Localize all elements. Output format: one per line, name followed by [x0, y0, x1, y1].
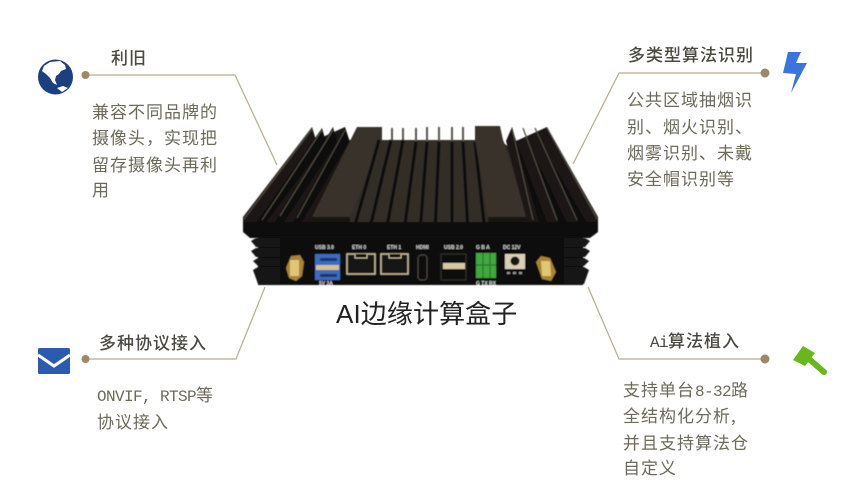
left raised block [312, 127, 382, 217]
text: Ai算法植入 description [623, 376, 749, 479]
heading: 多种协议接入: 多种协议接入 [99, 329, 207, 354]
text: Ai算法植入 description: 自定义 [623, 454, 677, 479]
heading: Ai算法植入: Ai算法植入 [650, 327, 740, 352]
text: 多类型算法识别 description: 安全帽识别等 [627, 165, 735, 190]
left fin group [243, 127, 350, 232]
text: 利旧 description: 摄像头，实现把 [92, 124, 218, 149]
front panel: DC 12V [503, 245, 521, 251]
lower edge band [243, 222, 598, 238]
device: AI edge computing box [242, 125, 599, 287]
heading: 利旧: 利旧 [111, 44, 147, 69]
middle fins [353, 140, 485, 232]
icon: gavel [793, 346, 827, 375]
right raised block [475, 126, 527, 217]
text: Ai算法植入 description: 支持单台8-32路 [623, 376, 749, 401]
front panel: HDMI [416, 245, 429, 251]
text: 多类型算法识别 description [627, 86, 753, 190]
text: 多类型算法识别 description: 公共区域抽烟识 [627, 86, 753, 111]
text: 利旧 description: 用 [92, 176, 110, 201]
right fin group [506, 127, 598, 232]
heading: 多类型算法识别: 多类型算法识别 [628, 41, 754, 66]
icon: lightning bolt [783, 52, 807, 93]
caption: AI边缘计算盒子: AI边缘计算盒子 [336, 299, 517, 329]
text: 利旧 description: 留存摄像头再利 [92, 151, 218, 176]
front panel: USB 3.0 [315, 245, 334, 251]
icon: globe [38, 60, 73, 94]
front panel: 5V 3A [319, 281, 333, 287]
antenna connectors [286, 255, 556, 281]
front panel: ETH 0 [352, 245, 366, 251]
front panel: G TX RX [476, 281, 497, 287]
text: 多种协议接入 description [97, 381, 214, 433]
front panel: USB 2.0 [444, 245, 463, 251]
text: 利旧 description: 兼容不同品牌的 [92, 98, 218, 123]
text: Ai算法植入 description: 全结构化分析, [623, 402, 737, 427]
icon: envelope [38, 348, 70, 374]
text: 多类型算法识别 description: 烟雾识别、未戴 [627, 139, 753, 164]
front panel: G B A [476, 245, 490, 251]
side vents [251, 238, 590, 284]
text: 利旧 description [92, 98, 218, 201]
front panel: ETH 1 [387, 245, 401, 251]
text: 多种协议接入 description: ONVIF, RTSP等 [97, 381, 214, 406]
text: Ai算法植入 description: 并且支持算法仓 [623, 429, 749, 454]
text: 多类型算法识别 description: 别、烟火识别、 [627, 113, 753, 138]
text: 多种协议接入 description: 协议接入 [97, 408, 169, 433]
base plate between fins [243, 140, 598, 232]
front panel [251, 236, 590, 287]
